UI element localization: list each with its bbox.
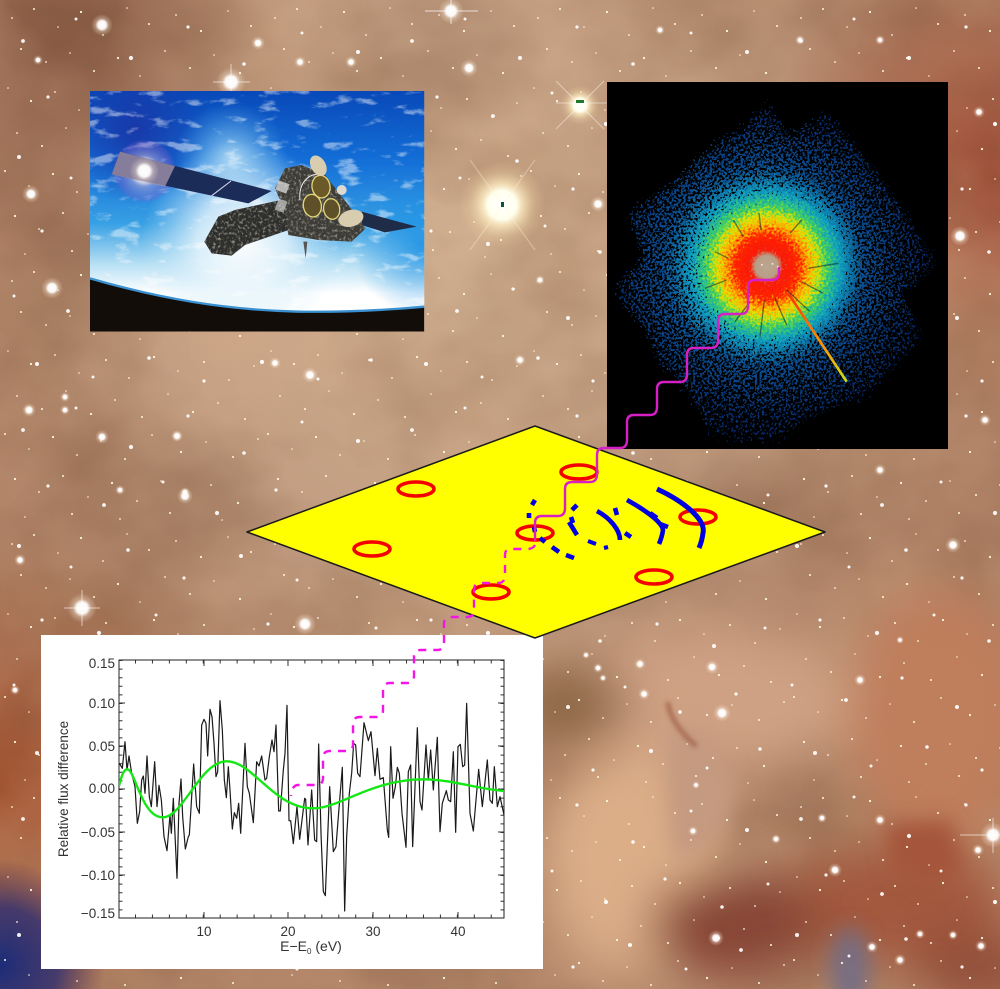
y axis labels: −0.05 [81,825,115,840]
satellite [112,152,417,258]
axis ticks [119,660,504,918]
x axis labels: 40 [450,924,466,939]
core hot pixels [761,263,779,268]
x axis title: (eV) [311,938,342,954]
x axis title: E−E [280,938,307,954]
panel: X-ray image [607,82,948,450]
measured spectrum line [119,701,504,911]
y axis labels: 0.10 [89,696,115,711]
y axis labels: 0.05 [89,739,115,754]
large central star with dark core [458,160,546,250]
x axis labels [196,924,466,939]
solar panel left [112,152,272,203]
blue scattered wave arcs [529,489,703,558]
X-ray photon scatter [618,105,942,450]
arrow: dashed reflected path from plane down to chart [291,545,535,796]
x axis labels: 10 [196,924,212,939]
y axis labels: −0.15 [81,906,115,921]
panel: yellow detector plane [247,426,825,638]
spacecraft body [275,165,366,242]
y axis labels: 0.15 [89,656,115,671]
panel: XMM-Newton satellite photo [90,91,424,332]
x axis labels: 20 [280,924,296,939]
arrow: solid photon path from X-ray image to plane [535,268,779,540]
panel: chart background [41,635,543,969]
y axis labels [81,656,115,921]
dish antennas [310,156,327,176]
solar panel right [362,212,417,232]
plot frame [119,660,504,918]
y axis title: Relative flux difference [56,721,71,857]
tan core [751,251,783,283]
red atom rings [354,465,716,599]
pillar head [668,704,695,745]
bright streak [788,293,847,382]
sun flare [113,139,176,203]
x axis labels: 30 [365,924,381,939]
y axis labels: 0.00 [89,781,115,796]
telescope tube [204,198,293,256]
chart: relative flux difference [56,656,504,956]
data traces [119,701,504,911]
fitted model curve [119,761,504,817]
mirror modules [311,175,331,199]
y axis labels: −0.10 [81,868,115,883]
x axis title: 0 [307,947,312,956]
star with green core and spikes [556,81,610,129]
dark spokes [705,213,838,337]
earth horizon [90,278,424,332]
